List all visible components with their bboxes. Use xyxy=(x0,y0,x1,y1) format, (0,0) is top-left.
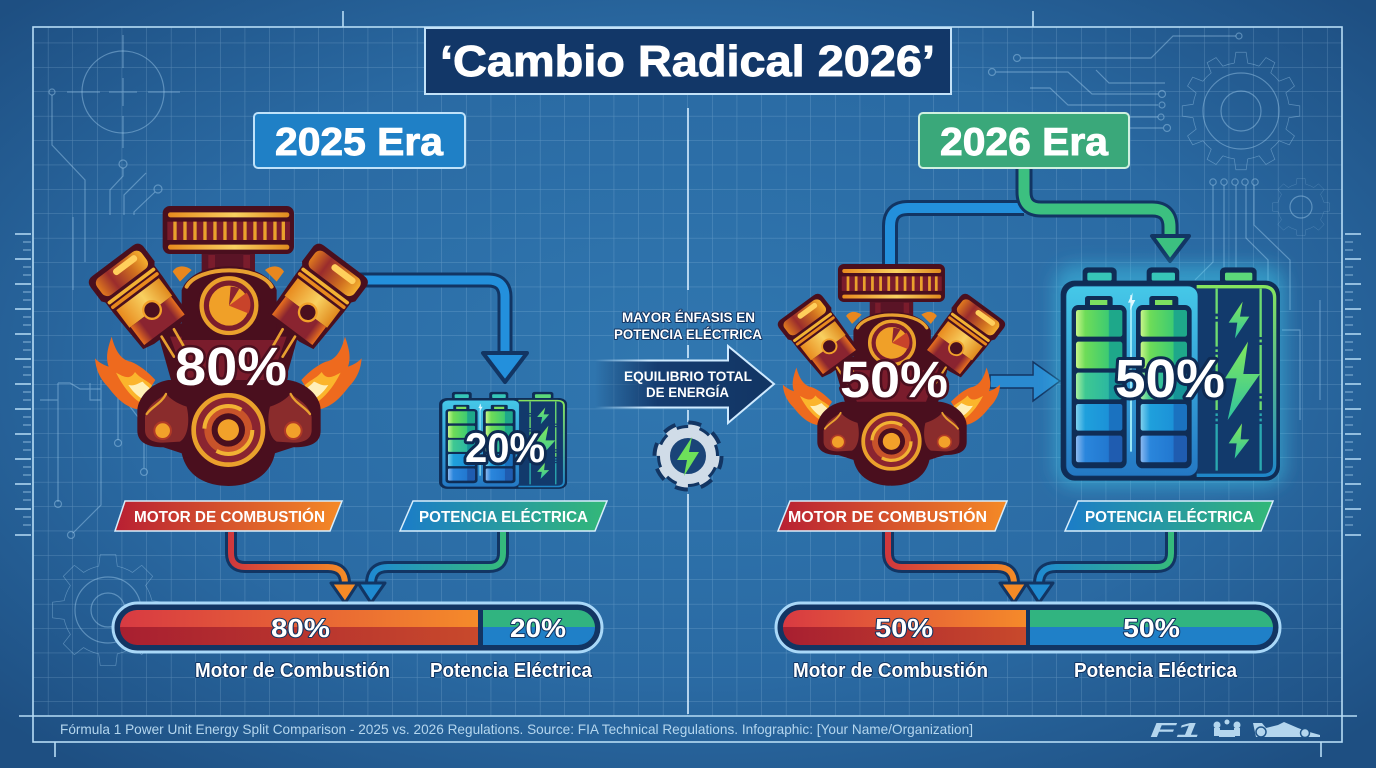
icon: combustion engine 50% xyxy=(775,264,1008,486)
heading: 2025 era: 2025 Era xyxy=(275,121,443,164)
text: mayor énfasis: POTENCIA ELÉCTRICA xyxy=(614,327,762,342)
text: mayor énfasis xyxy=(614,310,762,342)
legend: potencia eléctrica: Potencia Eléctrica xyxy=(1074,660,1238,682)
icon: battery 50%: 50% xyxy=(1115,349,1225,409)
panel: 2025 era xyxy=(86,206,607,682)
arrow: potencia to bar xyxy=(358,532,503,603)
label: motor de combustión xyxy=(778,501,1007,531)
arrow: potencia to bar xyxy=(1026,532,1171,603)
heading: 2026 era: 2026 Era xyxy=(940,121,1108,164)
icon: gear with bolt xyxy=(660,428,716,484)
label: motor de combustión xyxy=(115,501,342,531)
icon: battery 20%: 20% xyxy=(465,424,545,471)
panel: center transition xyxy=(595,310,774,484)
arrow: equilibrio total de energía: DE ENERGÍA xyxy=(646,385,729,400)
bar chart: 50 / 50 split xyxy=(776,603,1280,652)
bar chart: 80 / 20 split: 80% xyxy=(271,613,330,643)
arrow: era box to battery xyxy=(890,169,1189,270)
arrow: motor to bar xyxy=(231,532,358,603)
heading: 2025 era xyxy=(254,113,465,168)
icon: combustion engine 80%: 80% xyxy=(175,337,287,397)
label: potencia eléctrica xyxy=(400,501,607,531)
icon: battery 50% xyxy=(1055,265,1285,487)
arrow: equilibrio total de energía xyxy=(595,346,774,423)
bar chart: 50 / 50 split: 50% xyxy=(875,613,933,643)
icon: battery 20% xyxy=(439,392,567,489)
arrow: motor to bar xyxy=(888,532,1027,603)
label: potencia eléctrica: POTENCIA ELÉCTRICA xyxy=(419,507,588,526)
center divider xyxy=(687,108,689,714)
title: ‘Cambio Radical 2026’ xyxy=(440,37,935,86)
bar chart: 80 / 20 split: 20% xyxy=(510,613,566,643)
icon: f1 car xyxy=(1253,722,1320,738)
arrow: engine to battery 2026 xyxy=(990,362,1060,401)
legend: motor de combustión: Motor de Combustión xyxy=(793,660,988,682)
label: motor de combustión: MOTOR DE COMBUSTIÓN xyxy=(788,507,987,526)
icon: f1 logo: F1 xyxy=(1150,720,1200,742)
text: mayor énfasis: MAYOR ÉNFASIS EN xyxy=(622,310,755,325)
label: motor de combustión: MOTOR DE COMBUSTIÓN xyxy=(134,507,325,526)
bar chart: 80 / 20 split xyxy=(113,603,602,652)
title xyxy=(425,28,951,94)
icon: podium xyxy=(1214,720,1240,737)
legend: potencia eléctrica: Potencia Eléctrica xyxy=(430,660,593,682)
footer source text: Fórmula 1 Power Unit Energy Split Comparison - 2025 vs. 2026 Regulations. Source: FIA Technical Regulations. Infographic: [Your Name/Organization] xyxy=(60,721,973,737)
icon: combustion engine 50%: 50% xyxy=(840,351,948,408)
bar chart: 50 / 50 split: 50% xyxy=(1123,613,1180,643)
legend: motor de combustión: Motor de Combustión xyxy=(195,660,390,682)
icon: combustion engine 80% xyxy=(86,206,371,486)
label: potencia eléctrica: POTENCIA ELÉCTRICA xyxy=(1085,507,1254,526)
arrow: engine to battery 2025 xyxy=(355,280,527,382)
panel: 2026 era xyxy=(775,169,1285,682)
heading: 2026 era xyxy=(919,113,1129,168)
decorative circuit and gear outlines xyxy=(40,33,1330,666)
label: potencia eléctrica xyxy=(1065,501,1273,531)
arrow: equilibrio total de energía: EQUILIBRIO TOTAL xyxy=(624,369,752,384)
